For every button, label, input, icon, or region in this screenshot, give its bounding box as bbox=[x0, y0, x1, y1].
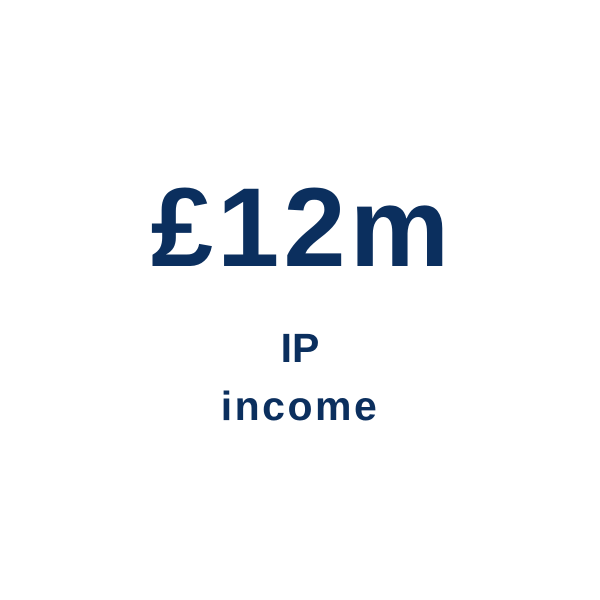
label: income: income bbox=[221, 383, 379, 429]
label: IP: IP bbox=[281, 325, 319, 371]
headline figure: £12m bbox=[151, 165, 453, 290]
